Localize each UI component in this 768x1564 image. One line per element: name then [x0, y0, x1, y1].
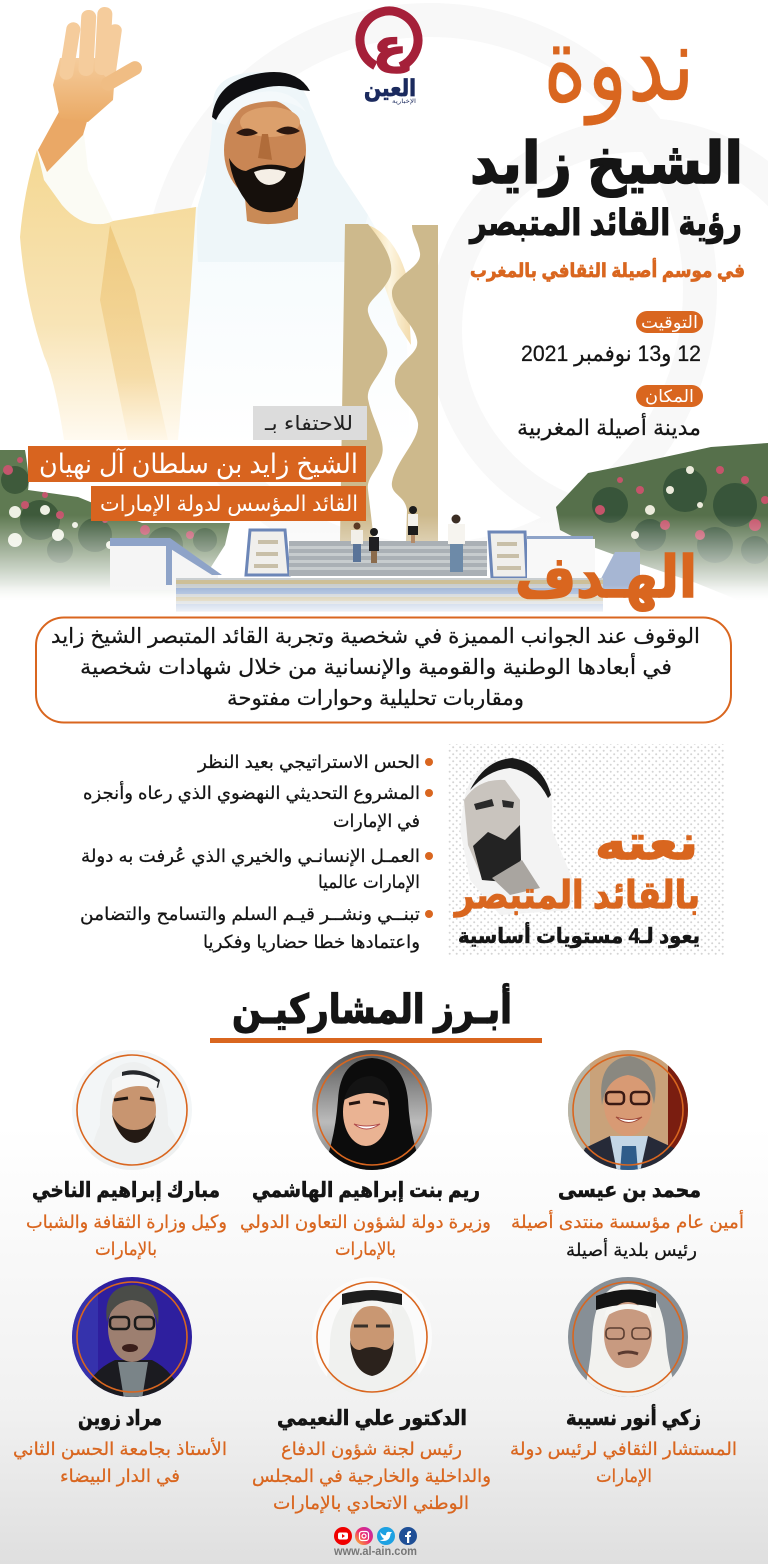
goal text line 1: الوقوف عند الجوانب المميزة في شخصية وتجربة القائد المتبصر الشيخ زايد	[51, 625, 700, 648]
bullet 4 line 2: واعتمادها خطا حضاريا وفكريا	[203, 932, 420, 953]
place: مدينة أصيلة المغربية	[517, 413, 701, 440]
role line 1: وزيرة دولة لشؤون التعاون الدولي	[240, 1212, 491, 1233]
ring	[77, 1055, 187, 1165]
icon: facebook	[399, 1527, 417, 1545]
participant: Reem Al Hashimy	[240, 1050, 491, 1259]
website: www.al-ain.com	[333, 1546, 417, 1558]
bullet 3 line 1: العمـل الإنسانـي والخيري الذي عُرفت به دولة	[81, 846, 420, 867]
agal	[212, 72, 310, 120]
heading: the visionary leader: بالقائد المتبصر	[453, 875, 700, 917]
photo	[568, 1277, 688, 1399]
title: nadwa: ندوة	[543, 7, 695, 126]
panel: visionary leader	[448, 744, 725, 955]
photo	[568, 1050, 688, 1172]
ring	[77, 1282, 187, 1392]
photo	[312, 1050, 432, 1172]
eyes	[236, 126, 300, 136]
role line 2: رئيس بلدية أصيلة	[566, 1238, 697, 1260]
role line 1: أمين عام مؤسسة منتدى أصيلة	[511, 1210, 744, 1233]
portrait: young Sheikh Zayed	[460, 758, 575, 915]
caption: four levels: يعود لـ4 مستويات أساسية	[458, 921, 700, 948]
bullet 3 line 2: الإمارات عالميا	[318, 872, 420, 892]
palm	[53, 58, 116, 122]
photo	[72, 1277, 192, 1399]
bullet 1: الحس الاستراتيجي بعيد النظر	[197, 752, 420, 773]
left wall	[110, 542, 218, 590]
goal text line 3: ومقاربات تحليلية وحوارات مفتوحة	[227, 687, 524, 710]
bullet 4 line 1: تبنــي ونشــر قيـم السلم والتسامح والتضامن	[80, 904, 420, 925]
role line 1: المستشار الثقافي لرئيس دولة	[510, 1439, 737, 1460]
stairs and blue walls	[110, 530, 640, 612]
caption: celebrating: للاحتفاء بـ	[264, 413, 353, 435]
goal panel	[36, 618, 731, 722]
ring	[317, 1282, 427, 1392]
bullet markers	[425, 758, 433, 918]
people on stairs	[351, 506, 465, 572]
faint background shapes	[160, 20, 768, 560]
forearm	[38, 110, 88, 172]
neck	[245, 198, 298, 224]
ring	[317, 1055, 427, 1165]
logo ring	[350, 1, 428, 79]
caption: Sheikh name: الشيخ زايد بن سلطان آل نهيان	[39, 448, 358, 480]
monument	[340, 224, 438, 541]
fingers	[58, 7, 145, 93]
right shoulder gold	[368, 225, 411, 345]
participant: Mubarak Al Nakhi	[26, 1050, 227, 1259]
logo: Al-Ain News	[350, 1, 428, 105]
name: مبارك إبراهيم الناخي	[32, 1179, 220, 1202]
icon: youtube	[334, 1527, 352, 1545]
logo wordmark: العين	[364, 75, 416, 102]
caption: founder: القائد المؤسس لدولة الإمارات	[100, 491, 358, 517]
name: ريم بنت إبراهيم الهاشمي	[252, 1179, 480, 1202]
role line 1: وكيل وزارة الثقافة والشباب	[26, 1212, 227, 1233]
lower stairs	[176, 578, 603, 612]
right tower	[489, 532, 527, 578]
name: الدكتور علي النعيمي	[277, 1407, 467, 1430]
left flower bush	[0, 450, 230, 593]
name: زكي أنور نسيبة	[566, 1403, 701, 1430]
name: محمد بن عيسى	[558, 1179, 701, 1202]
participant: Ali Al Nuaimi	[252, 1277, 491, 1514]
role line 3: الوطني الاتحادي بالإمارات	[273, 1493, 469, 1514]
title: Sheikh Zayed: الشيخ زايد	[470, 131, 743, 198]
name: مراد زوين	[78, 1407, 162, 1430]
role line 2: بالإمارات	[95, 1239, 157, 1259]
mouth	[254, 169, 286, 185]
hero: sheikh illustration and monument	[20, 7, 438, 541]
forehead highlight	[240, 107, 300, 137]
place label	[636, 385, 703, 407]
participant: Zaki Nusseibeh	[510, 1277, 737, 1486]
role line 2: الإمارات	[596, 1466, 652, 1486]
right flower bush	[556, 443, 768, 594]
left tower	[246, 530, 289, 575]
beard	[229, 155, 305, 212]
goal text line 2: في أبعادها الوطنية والقومية والإنسانية من خلال شهادات شخصية	[80, 653, 672, 679]
right wall	[527, 539, 595, 581]
ring	[573, 1055, 683, 1165]
white thobe	[178, 207, 410, 446]
nose	[258, 134, 272, 160]
bullet list	[80, 752, 433, 953]
logo small print: الإخبارية	[392, 98, 416, 105]
upper stairs	[289, 541, 487, 576]
caption: founder	[91, 486, 366, 521]
icon: instagram	[355, 1527, 373, 1545]
robe and sleeve	[20, 150, 196, 440]
role line 1: رئيس لجنة شؤون الدفاع	[281, 1439, 462, 1460]
social icons	[334, 1527, 417, 1545]
bullet 2 line 2: في الإمارات	[333, 811, 420, 832]
face	[224, 99, 306, 201]
white sleeve cuff	[37, 125, 113, 224]
photo	[72, 1050, 192, 1172]
time label	[636, 311, 703, 333]
participant: Mohamed Benaissa	[511, 1050, 744, 1260]
logo letter: ع	[373, 20, 410, 73]
ghutra band under agal	[216, 91, 306, 125]
time label: التوقيت	[641, 313, 698, 332]
ghutra	[197, 72, 368, 262]
place label: المكان	[645, 387, 694, 406]
photo	[322, 1290, 422, 1376]
role line 2: والداخلية والخارجية في المجلس	[252, 1466, 491, 1487]
heading: we call him: نعته	[595, 817, 698, 870]
ring	[573, 1282, 683, 1392]
fade over bushes	[0, 515, 768, 612]
heading: top participants: أبـرز المشاركيـن	[232, 983, 512, 1033]
role line 1: الأستاذ بجامعة الحسن الثاني	[13, 1438, 227, 1460]
participant: Mourad Zouine	[13, 1277, 227, 1487]
robe fold shading	[100, 225, 168, 440]
icon: twitter	[377, 1527, 395, 1545]
fade at the foot of the hero	[0, 585, 768, 617]
bullet 2 line 1: المشروع التحديثي النهضوي الذي رعاه وأنجزه	[83, 781, 420, 804]
role line 2: في الدار البيضاء	[60, 1466, 180, 1487]
heading: goal: الهـدف	[515, 545, 697, 612]
caption: celebrating	[253, 406, 367, 440]
role line 2: بالإمارات	[335, 1239, 396, 1259]
date: 12 و13 نوفمبر 2021	[521, 341, 701, 366]
heading: top participants	[210, 983, 542, 1043]
